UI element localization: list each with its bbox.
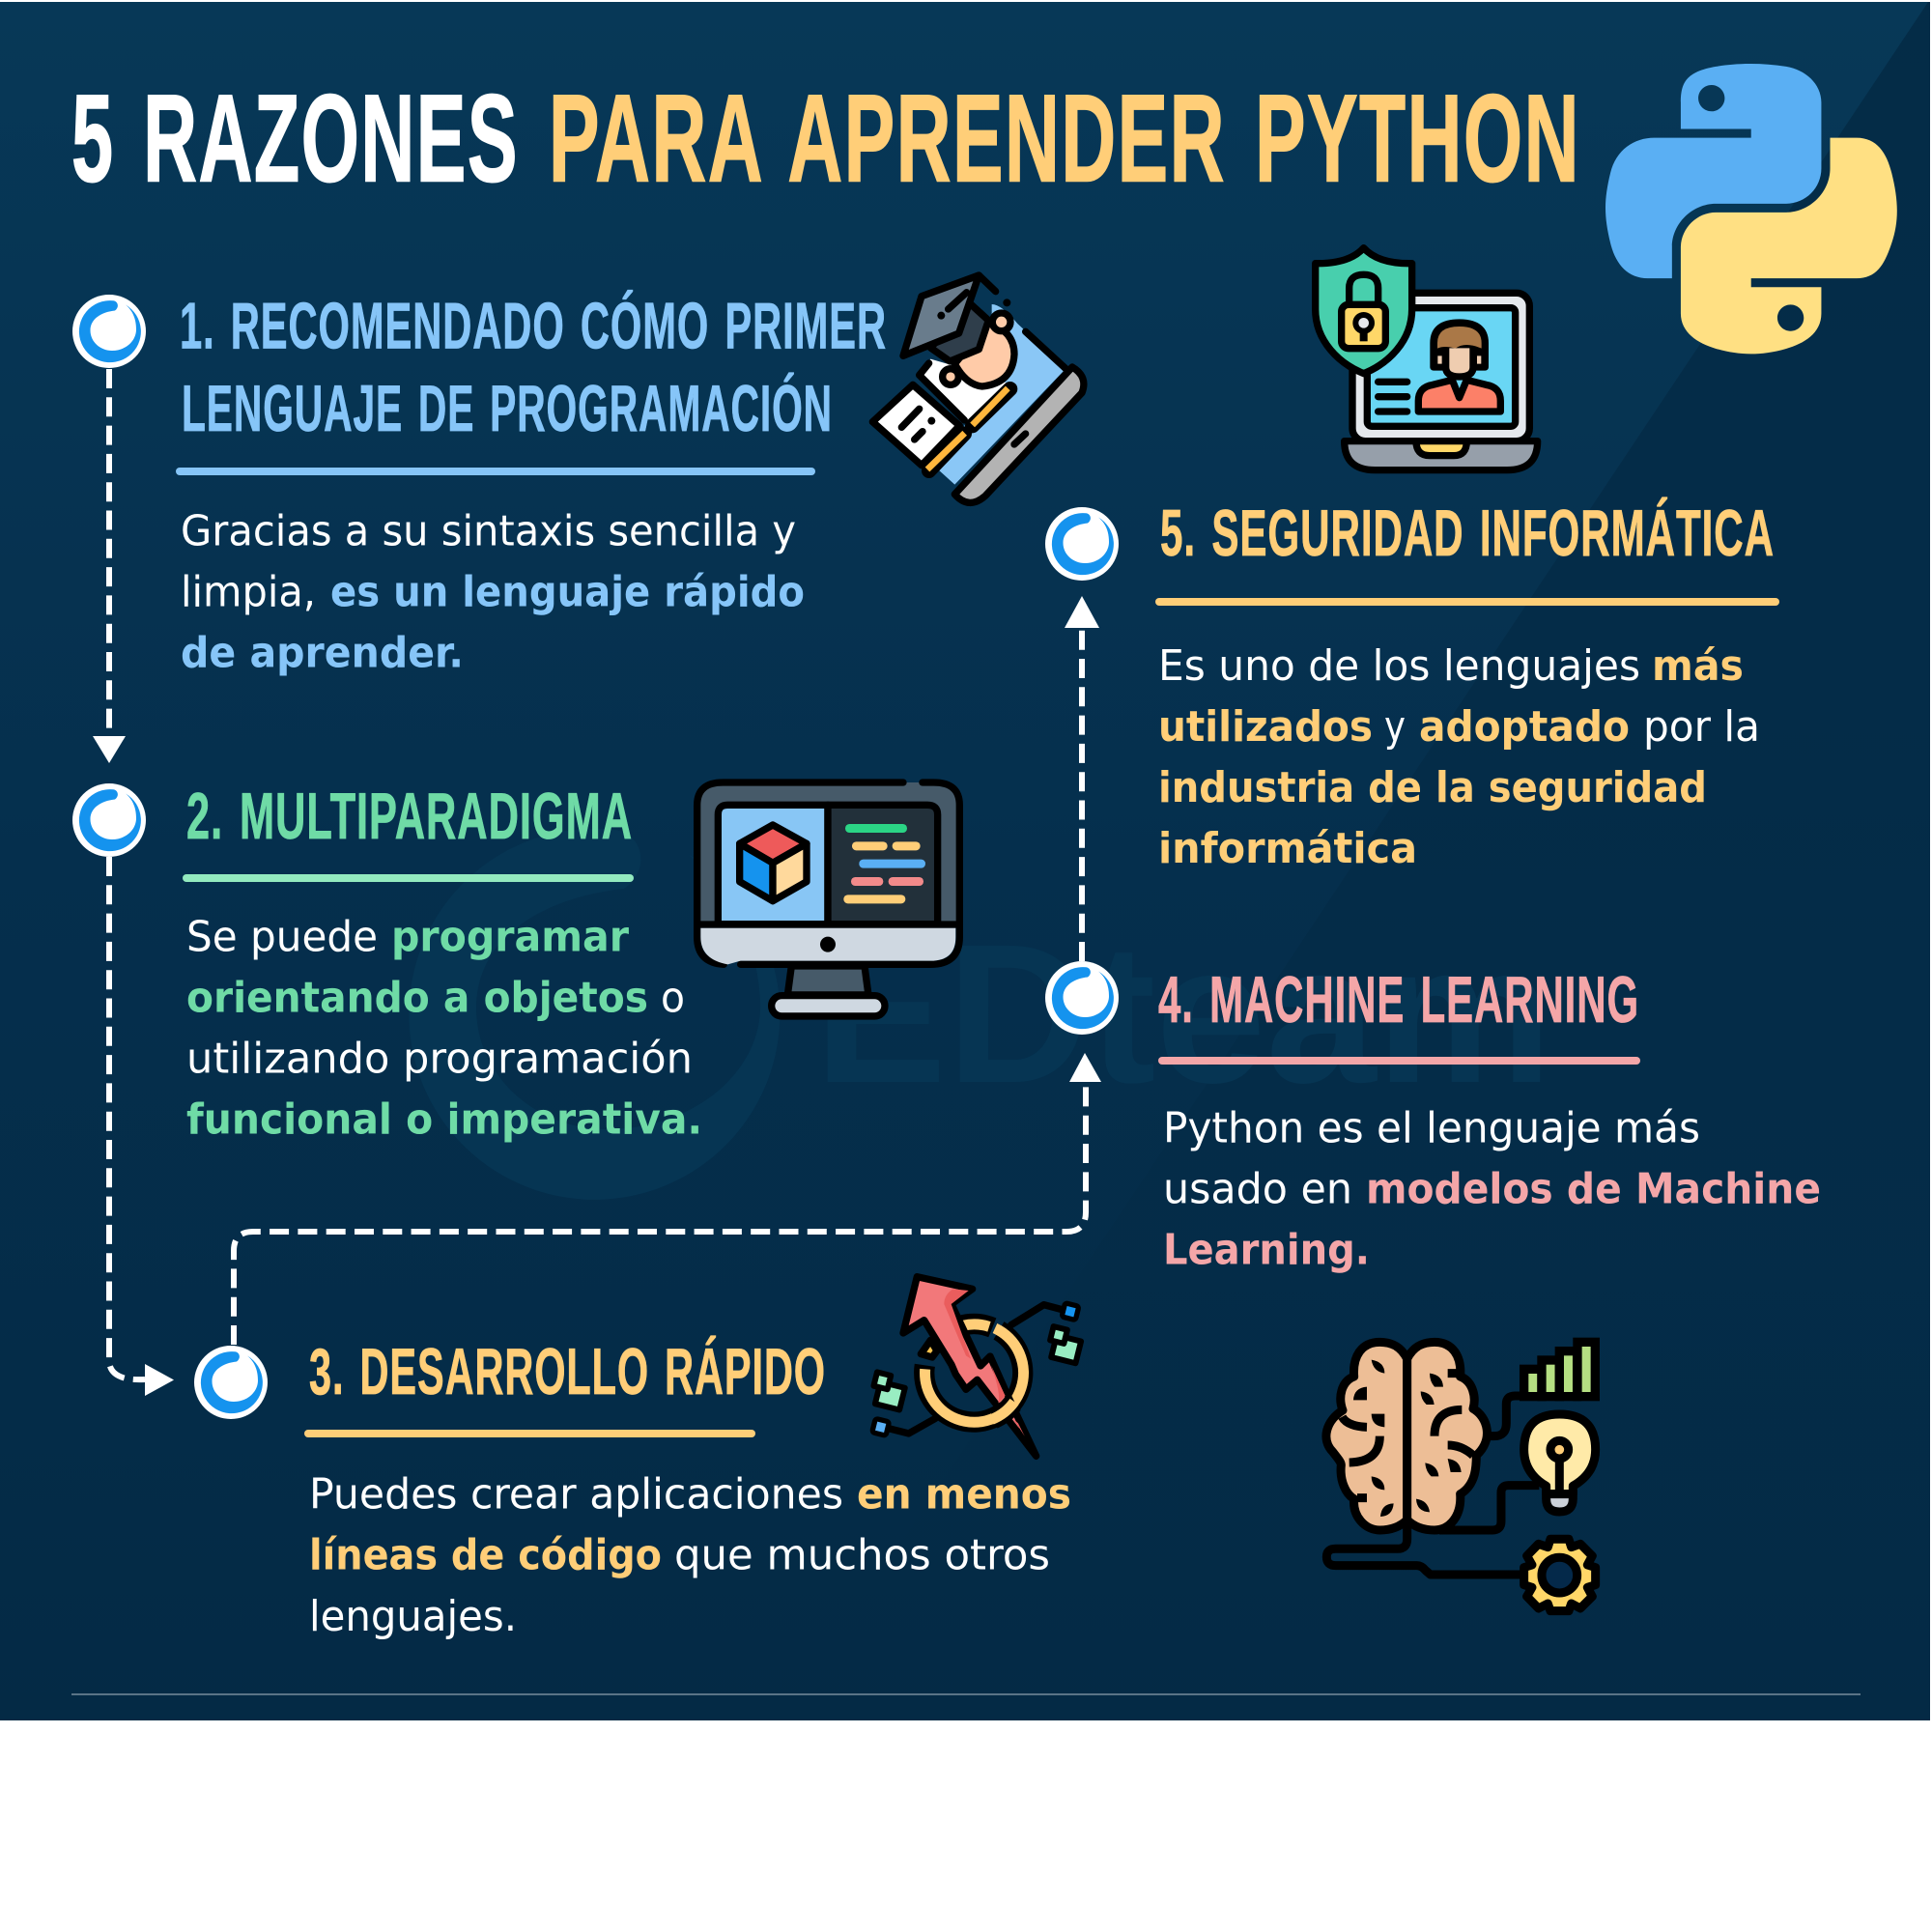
body text 1: de aprender. [181,630,464,678]
body text 4: Learning. [1163,1227,1370,1275]
body text 5: utilizados [1158,703,1373,752]
heading 4: 4. MACHINE LEARNING [1158,963,1639,1037]
body text 5: Es uno de los lenguajes [1158,642,1640,691]
body text 4: usado en [1163,1165,1352,1213]
icon: graduate with book and tablet [872,275,1084,502]
marker 3 [194,1346,268,1419]
body text 5: por la [1643,703,1760,752]
icon: cybersecurity laptop with shield [1316,248,1538,470]
body text 5: industria de la seguridad [1158,764,1707,812]
body text 1: es un lenguaje rápido [330,568,805,616]
body text 2: utilizando programación [186,1036,693,1084]
body text 4: Python es el lenguaje más [1163,1105,1700,1153]
body text 5: más [1652,642,1744,691]
body text 5 [1158,642,1760,873]
body text 1 [181,508,805,678]
body text 2: funcional o imperativa. [186,1095,702,1144]
body text 5: adoptado [1419,703,1630,752]
panel: reason 2 [183,780,702,1144]
heading 3: 3. DESARROLLO RÁPIDO [309,1335,826,1408]
body text 3: líneas de código [309,1532,662,1580]
title [71,70,1580,209]
body text 3: que muchos otros [674,1532,1050,1580]
icon: speed arrow with ring [872,1277,1081,1456]
marker 2 [72,783,146,857]
underline 4 [1158,1057,1640,1065]
body text 3 [309,1470,1071,1641]
body text 1: Gracias a su sintaxis sencilla y [181,508,796,556]
footer divider [71,1693,1861,1695]
body text 4: modelos de Machine [1366,1165,1821,1213]
dashed connector: 3 to 4 [234,1053,1101,1345]
title: 5 RAZONES [71,70,519,209]
watermark: EDteam logo: EDteam [814,903,1552,1124]
panel: reason 5 [1155,497,1779,873]
underline 5 [1155,598,1779,606]
body text 2 [186,914,702,1144]
heading 1 [180,290,887,445]
icon: brain with chart, bulb and gear [1326,1342,1596,1611]
dashed connector: 2 to 3 [109,857,174,1396]
body text 5: informática [1158,825,1417,873]
body text 5: y [1384,703,1406,752]
icon: monitor with cube and code [697,782,959,1016]
icon: python logo [1605,64,1897,354]
underline 3 [304,1430,755,1437]
heading 1: 1. RECOMENDADO CÓMO PRIMER [180,290,887,363]
dashed connector: 1 to 2 [93,369,126,763]
panel: reason 1 [176,290,887,678]
panel: reason 3 [304,1335,1071,1641]
body text 4 [1163,1105,1821,1275]
heading 1: LENGUAJE DE PROGRAMACIÓN [182,372,833,445]
marker 5 [1045,507,1119,581]
heading 2: 2. MULTIPARADIGMA [186,780,633,853]
underline 2 [183,874,634,882]
body text 1: limpia, [181,568,316,616]
body text 2: o [661,974,685,1022]
body text 3: en menos [857,1470,1071,1519]
body text 2: programar [391,914,630,962]
underline 1 [176,468,815,475]
marker 4 [1045,961,1119,1035]
marker 1 [72,295,146,368]
body text 2: Se puede [186,914,378,962]
dashed connector: 4 to 5 [1065,596,1099,961]
body text 2: orientando a objetos [186,974,648,1022]
panel: reason 4 [1158,963,1821,1275]
body text 3: Puedes crear aplicaciones [309,1470,843,1519]
watermark: EDteam logo [409,829,1552,1200]
body text 3: lenguajes. [309,1593,517,1641]
